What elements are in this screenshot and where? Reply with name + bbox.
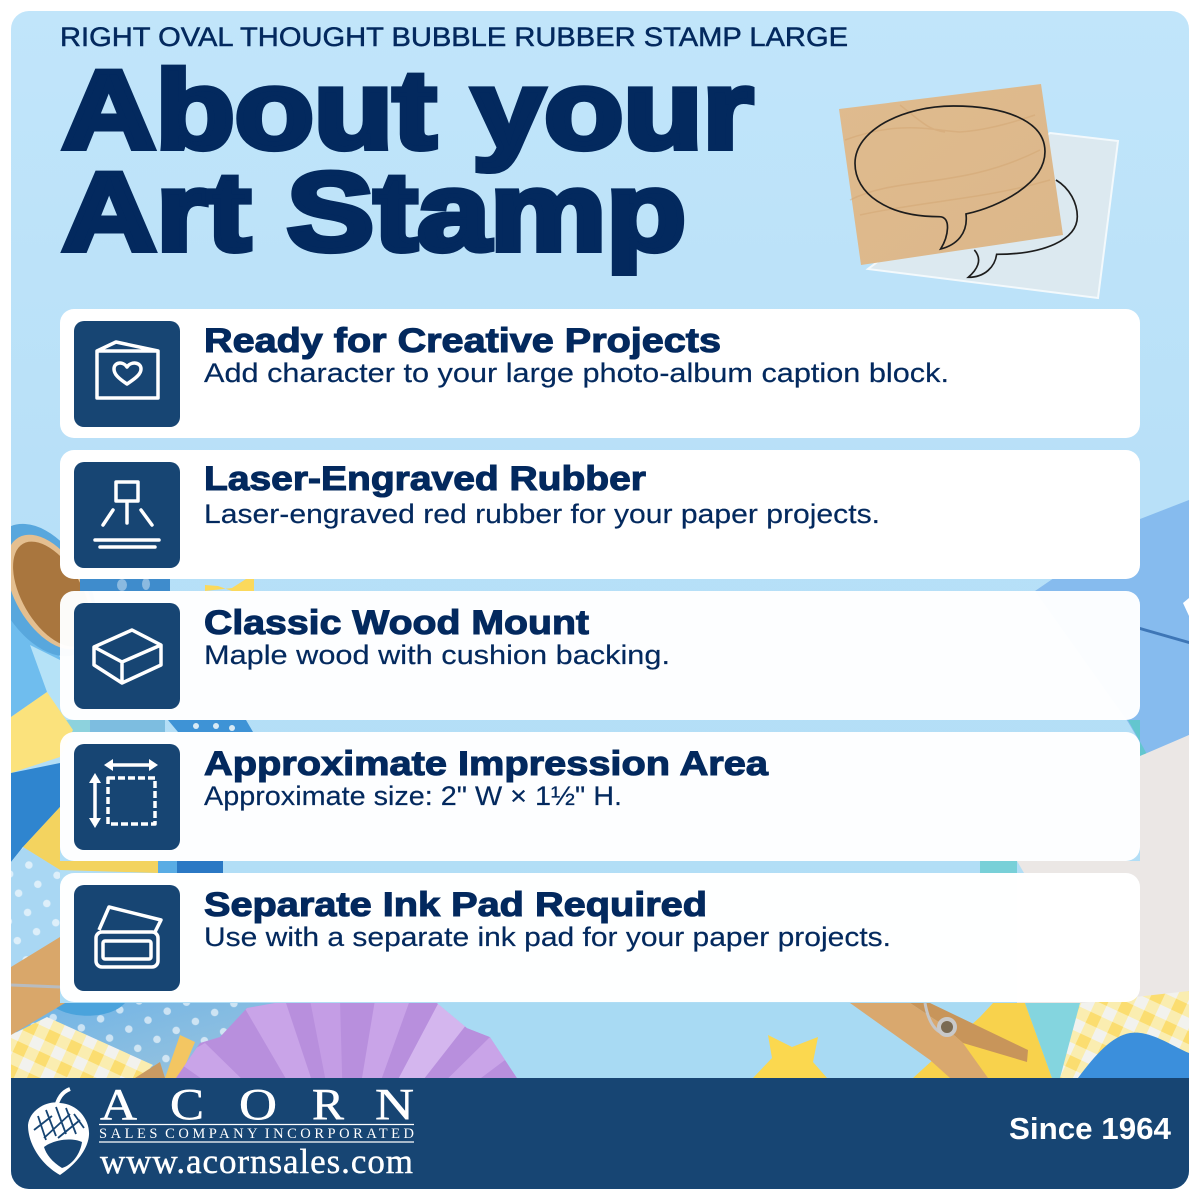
product image: stamp and impression (839, 84, 1118, 298)
card: approximate impression area (60, 732, 1140, 861)
title: Art Stamp (62, 150, 686, 274)
blue ribbon (11, 763, 60, 862)
icon: dimensions (74, 744, 180, 850)
heading: Separate Ink Pad Required (204, 886, 707, 924)
card: ready for creative projects (60, 309, 1140, 438)
clothespin left (11, 937, 65, 1035)
ACORN wordmark: C (170, 1080, 204, 1129)
yellow star (753, 1035, 827, 1078)
acorn logo (28, 1089, 89, 1175)
gingham paper (11, 1017, 153, 1078)
description: Add character to your large photo-album caption block. (204, 358, 949, 388)
teal wedge (1128, 720, 1148, 756)
icon: photo card with heart (74, 321, 180, 427)
heading: Approximate Impression Area (204, 745, 769, 783)
footer band (11, 1078, 1189, 1189)
ACORN wordmark: O (239, 1080, 277, 1129)
wordmark rules (99, 1124, 414, 1142)
clothespin right (850, 1003, 1028, 1078)
gingham right (1060, 991, 1189, 1078)
icon: ink pad (74, 885, 180, 991)
heading: Classic Wood Mount (204, 604, 589, 642)
icon: wood block (74, 603, 180, 709)
paper impression (868, 133, 1118, 298)
description: Use with a separate ink pad for your paper projects. (204, 922, 891, 952)
company line: SALES COMPANY INCORPORATED (99, 1126, 414, 1142)
yellow triangle paper (913, 1003, 1052, 1078)
website: www.acornsales.com (100, 1142, 413, 1181)
ACORN wordmark: A (100, 1080, 137, 1129)
teal paper (1025, 1003, 1083, 1078)
heading: Laser-Engraved Rubber (204, 460, 646, 498)
yellow paper lower (23, 807, 158, 873)
title: About your (62, 48, 753, 172)
ACORN wordmark: R (312, 1080, 345, 1129)
washi tape roll (11, 524, 80, 656)
purple paper fan (176, 1003, 517, 1078)
yellow paper (11, 692, 73, 773)
pale paper (1017, 735, 1189, 1003)
title (62, 48, 753, 274)
description: Laser-engraved red rubber for your paper projects. (204, 499, 880, 529)
description: Approximate size: 2" W × 1½" H. (204, 781, 622, 811)
icon: laser (74, 462, 180, 568)
dotted paper (11, 847, 60, 894)
heading: Ready for Creative Projects (204, 322, 721, 360)
ACORN wordmark (100, 1090, 414, 1120)
card: classic wood mount (60, 591, 1140, 720)
kicker line: RIGHT OVAL THOUGHT BUBBLE RUBBER STAMP LARGE (60, 22, 848, 52)
blue ribbon right (1078, 1033, 1189, 1078)
blue envelope (1035, 500, 1189, 756)
card: separate ink pad required (60, 873, 1140, 1002)
card: laser-engraved rubber (60, 450, 1140, 579)
wood stamp (839, 84, 1063, 265)
since 1964: Since 1964 (1009, 1111, 1172, 1146)
ACORN wordmark: N (375, 1080, 414, 1129)
light blue surface bottom (437, 1003, 517, 1078)
description: Maple wood with cushion backing. (204, 640, 670, 670)
tape below the roll (11, 620, 60, 717)
